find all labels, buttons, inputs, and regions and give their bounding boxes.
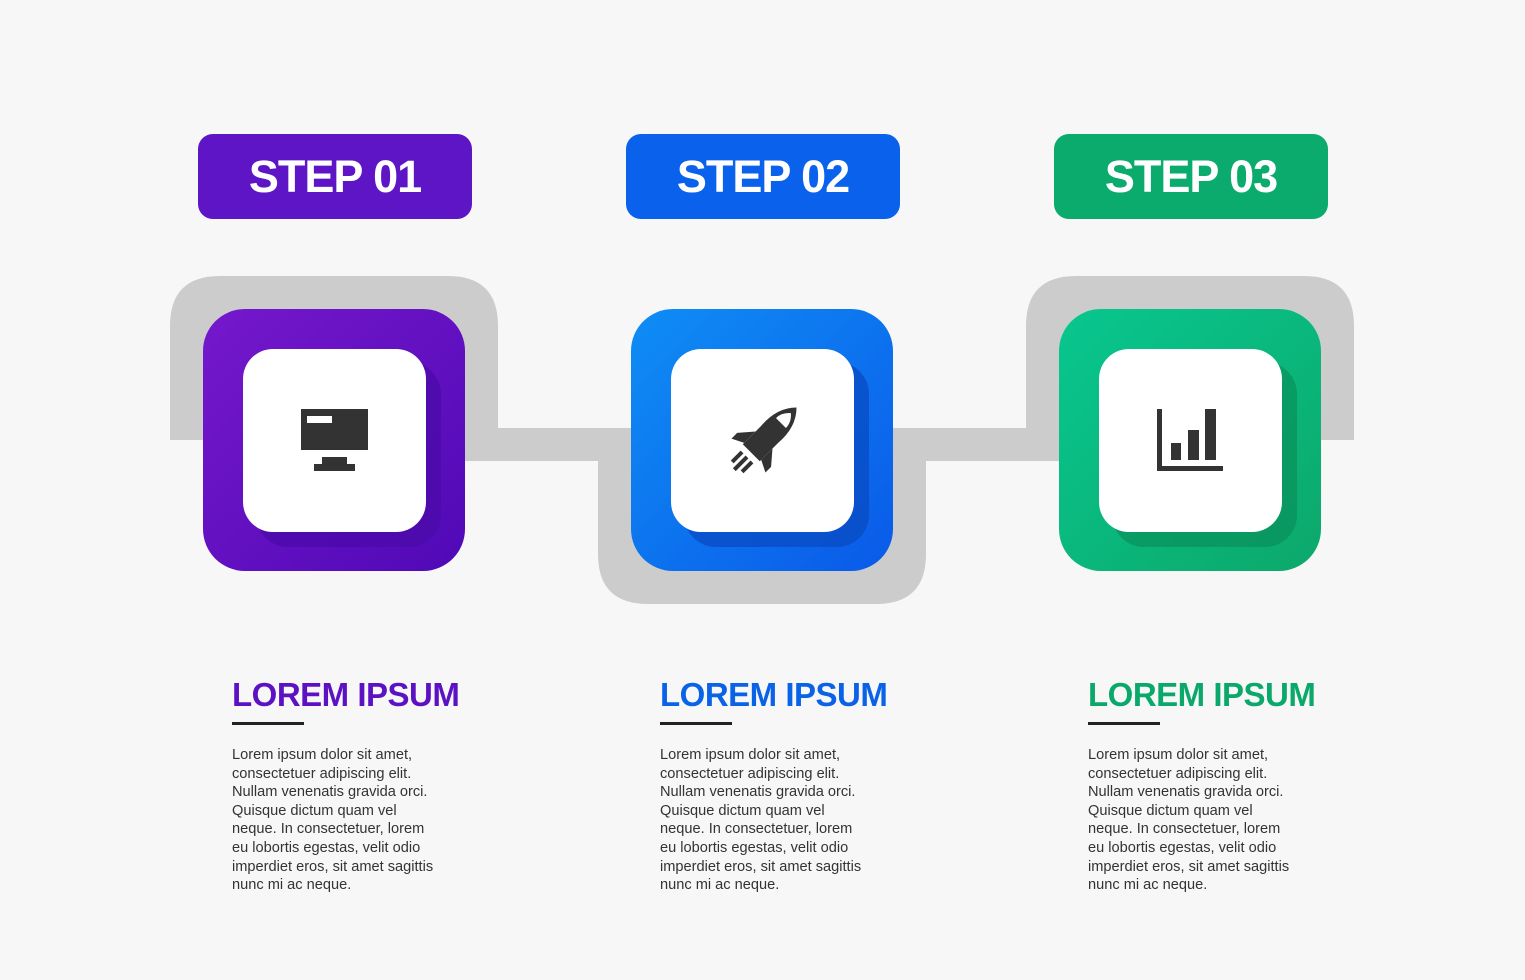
text column 2: LOREM IPSUM bbox=[660, 676, 887, 713]
step label 1 bbox=[198, 134, 472, 219]
text column 2: Lorem ipsum dolor sit amet, bbox=[660, 747, 840, 763]
text column 3: nunc mi ac neque. bbox=[1088, 877, 1207, 893]
text column 1 bbox=[232, 676, 459, 893]
text column 3: consectetuer adipiscing elit. bbox=[1088, 766, 1267, 782]
step label 2: STEP 02 bbox=[677, 151, 849, 202]
text column 1: consectetuer adipiscing elit. bbox=[232, 766, 411, 782]
square 3 bbox=[1059, 309, 1321, 571]
text column 3: imperdiet eros, sit amet sagittis bbox=[1088, 859, 1289, 875]
text column 1: imperdiet eros, sit amet sagittis bbox=[232, 859, 433, 875]
text column 3: Lorem ipsum dolor sit amet, bbox=[1088, 747, 1268, 763]
icon: monitor bbox=[301, 409, 368, 471]
text column 1: eu lobortis egestas, velit odio bbox=[232, 840, 420, 856]
text column 2: Quisque dictum quam vel bbox=[660, 803, 825, 819]
square 1 bbox=[203, 309, 465, 571]
text column 1: Nullam venenatis gravida orci. bbox=[232, 784, 427, 800]
step label 2 bbox=[626, 134, 900, 219]
text column 3: neque. In consectetuer, lorem bbox=[1088, 821, 1280, 837]
text column 1: Quisque dictum quam vel bbox=[232, 803, 397, 819]
text column 3: Quisque dictum quam vel bbox=[1088, 803, 1253, 819]
step label 3: STEP 03 bbox=[1105, 151, 1277, 202]
text column 2: eu lobortis egestas, velit odio bbox=[660, 840, 848, 856]
text column 1: nunc mi ac neque. bbox=[232, 877, 351, 893]
text column 3: Nullam venenatis gravida orci. bbox=[1088, 784, 1283, 800]
step label 1: STEP 01 bbox=[249, 151, 421, 202]
text column 1: Lorem ipsum dolor sit amet, bbox=[232, 747, 412, 763]
text column 3: eu lobortis egestas, velit odio bbox=[1088, 840, 1276, 856]
step label 3 bbox=[1054, 134, 1328, 219]
icon: rocket bbox=[717, 391, 813, 487]
text column 2: nunc mi ac neque. bbox=[660, 877, 779, 893]
text column 2: Nullam venenatis gravida orci. bbox=[660, 784, 855, 800]
text column 2: consectetuer adipiscing elit. bbox=[660, 766, 839, 782]
text column 1: neque. In consectetuer, lorem bbox=[232, 821, 424, 837]
text column 2: imperdiet eros, sit amet sagittis bbox=[660, 859, 861, 875]
square 2 bbox=[631, 309, 893, 571]
text column 3 bbox=[1088, 676, 1315, 893]
text column 2: neque. In consectetuer, lorem bbox=[660, 821, 852, 837]
text column 1: LOREM IPSUM bbox=[232, 676, 459, 713]
text column 3: LOREM IPSUM bbox=[1088, 676, 1315, 713]
icon: bar chart bbox=[1157, 409, 1223, 471]
gray path bbox=[170, 276, 1354, 604]
text column 2 bbox=[660, 676, 887, 893]
